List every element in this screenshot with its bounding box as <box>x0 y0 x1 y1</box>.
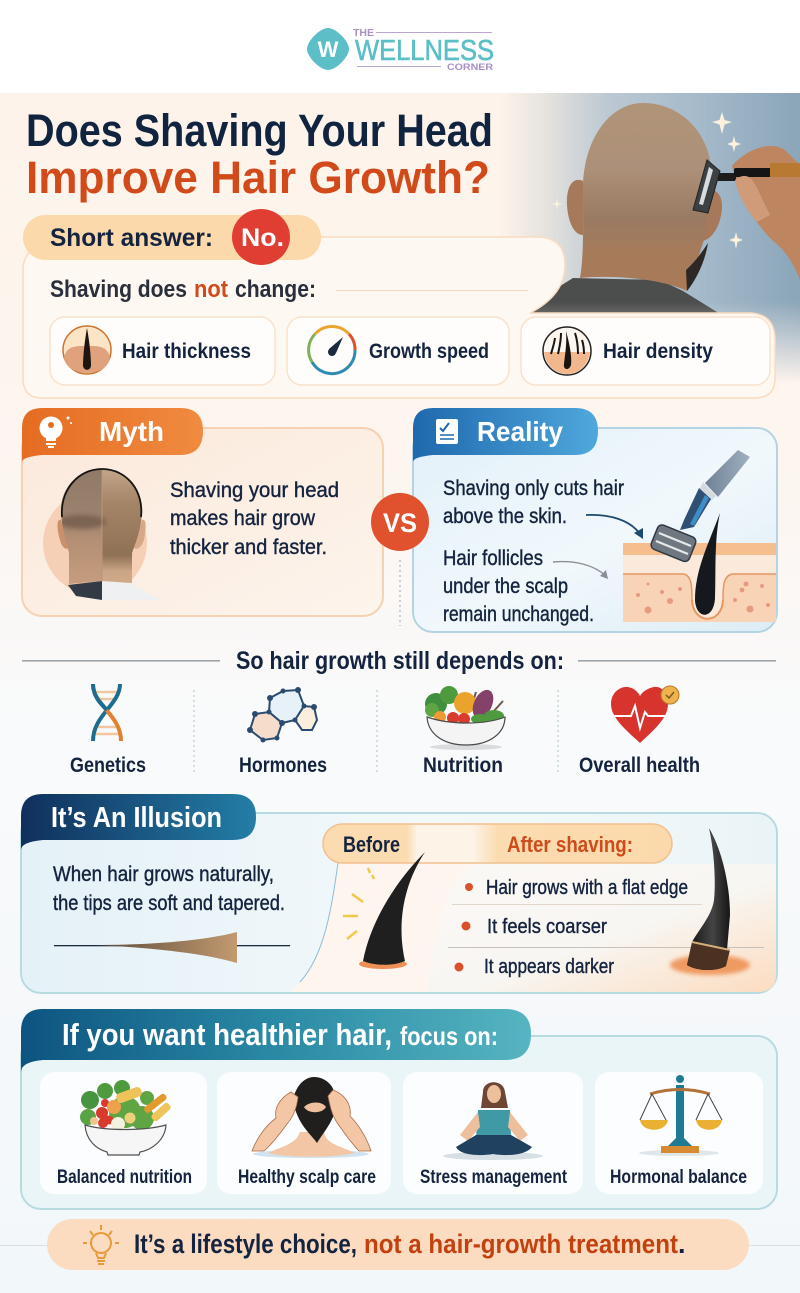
heading: so hair growth still depends on: So hair growth still depends on: <box>236 647 564 675</box>
illustration: hair before <box>343 852 425 969</box>
razor <box>650 450 750 563</box>
myth text: makes hair grow <box>170 506 315 530</box>
illustration: head half and half <box>43 465 160 600</box>
short answer pill <box>23 209 321 265</box>
subheading: not <box>194 276 228 303</box>
vs badge: VS <box>383 508 417 538</box>
myth text <box>170 478 339 559</box>
before after pill: Before <box>343 832 400 857</box>
ears <box>567 180 583 235</box>
illusion tab <box>21 794 256 850</box>
card: hair density <box>521 317 770 385</box>
factor: hormones: Hormones <box>239 754 327 777</box>
reality tab <box>413 408 598 462</box>
icon: meditating woman <box>443 1082 543 1160</box>
hand back <box>732 146 800 280</box>
illusion tab: It’s An Illusion <box>51 802 222 834</box>
razor head <box>693 160 720 213</box>
card: healthy scalp care <box>217 1072 391 1194</box>
natural hair text: When hair grows naturally, <box>53 863 274 886</box>
illustration: hair after <box>670 828 750 975</box>
title: Does Shaving Your Head <box>26 105 493 156</box>
logo: W <box>318 37 339 62</box>
myth tab: Myth <box>99 416 164 447</box>
footer callout: not a hair-growth treatment <box>364 1229 678 1259</box>
icon: dna <box>93 684 121 741</box>
thumb <box>735 176 770 222</box>
after shaving list: It feels coarser <box>487 916 607 938</box>
icon: salad bowl <box>80 1080 172 1155</box>
beard <box>686 243 708 291</box>
illustration: tapered hair <box>54 932 290 963</box>
photo: man shaving head <box>500 93 800 383</box>
factor: overall health <box>579 686 700 777</box>
shaved head <box>580 103 712 291</box>
card: hair thickness <box>50 317 275 385</box>
myth tab <box>22 408 203 462</box>
after shaving background <box>427 864 776 992</box>
panel: shaving does not change <box>23 209 775 398</box>
panel: it's an illusion <box>21 794 777 993</box>
card: stress management: Stress management <box>420 1167 568 1188</box>
card: healthy scalp care: Healthy scalp care <box>238 1167 376 1188</box>
card: growth speed: Growth speed <box>369 340 489 363</box>
short answer pill: No. <box>241 224 284 252</box>
after shaving list: It appears darker <box>484 956 614 978</box>
card: growth speed <box>287 317 509 385</box>
icon: heart with pulse <box>611 686 679 743</box>
card: hormonal balance <box>595 1072 763 1194</box>
reality text: under the scalp <box>443 575 568 598</box>
logo: CORNER <box>447 62 493 73</box>
factor: nutrition: Nutrition <box>423 754 503 777</box>
panel: myth <box>22 408 383 616</box>
after shaving list <box>448 877 764 978</box>
subheading <box>50 276 528 303</box>
footer callout: . <box>678 1229 686 1259</box>
footer callout <box>47 1219 749 1270</box>
icon: scales <box>639 1075 722 1156</box>
healthier tab <box>21 1009 531 1072</box>
reality text: Hair follicles <box>443 547 543 570</box>
icon: checklist <box>436 419 458 444</box>
healthier tab: If you want healthier hair, <box>62 1017 392 1052</box>
arrows <box>553 515 643 579</box>
factor: overall health: Overall health <box>579 754 700 777</box>
before after pill <box>323 824 672 863</box>
icon: bulb <box>83 1225 119 1264</box>
vs badge <box>371 493 429 551</box>
short answer pill: Short answer: <box>50 224 213 252</box>
factor: hormones <box>239 687 327 777</box>
footer callout: It’s a lifestyle choice, <box>134 1229 357 1259</box>
card: hormonal balance: Hormonal balance <box>610 1167 747 1188</box>
before area <box>290 863 473 992</box>
logo: WELLNESS <box>355 35 494 67</box>
card: balanced nutrition: Balanced nutrition <box>57 1167 192 1188</box>
title <box>26 105 493 203</box>
myth text: thicker and faster. <box>170 535 327 559</box>
reality text <box>443 477 624 626</box>
sparkles <box>551 112 743 249</box>
icon: molecule <box>247 687 317 742</box>
illustration: skin cross section with razor <box>623 450 776 622</box>
panel: reality <box>413 408 777 632</box>
title: Improve Hair Growth? <box>26 152 490 203</box>
factor: genetics: Genetics <box>70 754 146 777</box>
icon: vegetable bowl <box>425 686 505 750</box>
shirt <box>533 278 717 312</box>
card: balanced nutrition <box>40 1072 207 1194</box>
logo <box>307 28 494 73</box>
subheading: Shaving does <box>50 276 187 303</box>
after shaving list: Hair grows with a flat edge <box>486 877 688 899</box>
razor handle <box>718 163 800 181</box>
factor: genetics <box>70 684 146 777</box>
natural hair text: the tips are soft and tapered. <box>53 892 285 915</box>
card: hair density: Hair density <box>603 340 713 363</box>
card: stress management <box>403 1072 583 1194</box>
reality text: remain unchanged. <box>443 603 594 626</box>
reality text: above the skin. <box>443 505 567 528</box>
subheading: change: <box>235 276 316 303</box>
reality tab: Reality <box>477 416 563 447</box>
icon: hands on scalp <box>252 1077 371 1158</box>
myth text: Shaving your head <box>170 478 339 502</box>
healthier tab: focus on: <box>400 1021 498 1051</box>
natural hair text <box>53 863 285 915</box>
icon: light bulb <box>40 416 72 448</box>
card: hair thickness: Hair thickness <box>122 340 251 363</box>
before after pill: After shaving: <box>507 832 633 857</box>
panel: healthier hair <box>21 1009 777 1209</box>
factor: nutrition <box>423 686 505 777</box>
logo: THE <box>353 28 374 39</box>
reality text: Shaving only cuts hair <box>443 477 624 500</box>
